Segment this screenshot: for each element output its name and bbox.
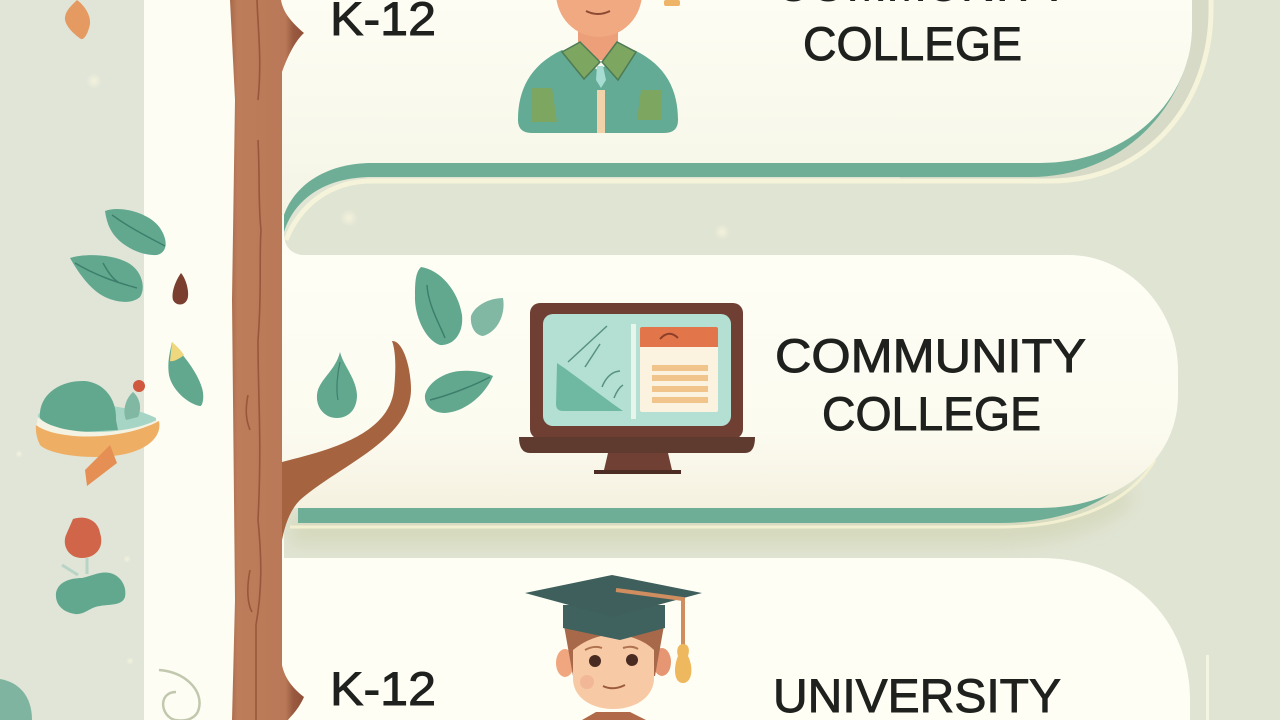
corner leaf <box>0 679 32 720</box>
pen strokes <box>568 326 623 398</box>
pale column behind trunk <box>144 0 284 720</box>
face <box>556 0 642 37</box>
leaf <box>70 255 143 302</box>
leaf vein <box>75 263 137 288</box>
teal band <box>298 483 1123 523</box>
small orange leaf <box>65 0 90 39</box>
foot <box>594 470 681 474</box>
panel: middle card "Community College" <box>282 255 1178 545</box>
document lines <box>652 365 708 403</box>
tassel <box>675 644 691 683</box>
icon: student in green shirt <box>518 0 680 133</box>
leaf vein <box>337 362 340 400</box>
base <box>519 437 755 453</box>
left pocket <box>532 88 557 122</box>
leaf with yellow tip <box>168 342 203 406</box>
leaf <box>415 267 462 345</box>
left margin strip <box>0 0 144 720</box>
screen artwork <box>556 363 623 411</box>
eyes <box>589 654 638 667</box>
cap board <box>525 575 702 617</box>
bowl small leaf <box>124 392 140 420</box>
icon: monitor with document <box>519 303 755 474</box>
brown seed <box>173 273 188 304</box>
glow dots <box>15 73 730 665</box>
teal band <box>284 50 1188 232</box>
header mark <box>660 334 678 339</box>
tassel cord <box>616 590 683 648</box>
smile <box>603 685 625 688</box>
document page <box>640 327 718 412</box>
ribbon <box>85 445 117 486</box>
icon: graduate with cap <box>525 575 702 720</box>
label: College: COLLEGE <box>822 387 1041 440</box>
leaf vein <box>430 377 490 400</box>
branch with leaves <box>282 267 504 540</box>
cream rim <box>290 460 1155 527</box>
bowl leaf <box>40 381 118 432</box>
lily pad <box>56 573 125 614</box>
tassel end <box>664 0 680 6</box>
cream sliver <box>1206 655 1209 720</box>
spiral <box>159 670 200 720</box>
collar right <box>602 42 636 80</box>
hair back <box>563 620 665 676</box>
shirt <box>582 712 646 720</box>
card surface <box>282 0 1192 215</box>
leaf <box>471 298 504 336</box>
leaf vein <box>112 215 165 246</box>
right pocket <box>637 90 661 120</box>
screen <box>543 314 731 426</box>
stand <box>604 453 672 470</box>
label: K-12 bottom: K-12 <box>330 662 436 715</box>
grey wedge under card <box>900 0 1210 181</box>
leaf vein <box>427 285 445 338</box>
card surface <box>282 558 1190 720</box>
smile <box>586 11 610 14</box>
branch <box>282 341 411 540</box>
brows <box>585 647 638 650</box>
yellow tip <box>170 342 184 361</box>
bowl rim <box>36 417 159 438</box>
face <box>573 634 654 709</box>
tree trunk <box>230 0 304 720</box>
cheek <box>580 675 594 689</box>
shadow below card <box>290 480 1130 545</box>
neck <box>578 28 618 60</box>
trunk <box>230 0 304 720</box>
bowl backing <box>38 404 156 436</box>
left side decorations <box>0 0 730 720</box>
panel: bottom card "University" <box>282 558 1209 720</box>
flower stem <box>62 558 87 575</box>
card surface <box>282 255 1178 508</box>
label: Community: COMMUNITY <box>775 329 1086 382</box>
cap band <box>563 605 665 640</box>
bark lines <box>246 0 261 720</box>
frame <box>530 303 743 439</box>
tie <box>596 66 606 88</box>
leaf <box>425 371 493 413</box>
panel: top card "Community College" <box>282 0 1211 240</box>
shirt <box>518 50 678 133</box>
document header <box>640 327 718 347</box>
pale corner of gap <box>284 236 302 255</box>
flower <box>65 518 101 558</box>
label: College: COLLEGE <box>803 17 1022 70</box>
leaf <box>317 352 357 418</box>
front placket <box>597 90 605 133</box>
leaf <box>105 209 166 255</box>
collar left <box>562 42 600 79</box>
bowl <box>36 421 159 457</box>
cream rim <box>286 0 1211 240</box>
ear right <box>653 648 671 676</box>
document shadow <box>631 324 636 419</box>
red berry <box>133 380 145 392</box>
ear left <box>556 649 574 677</box>
